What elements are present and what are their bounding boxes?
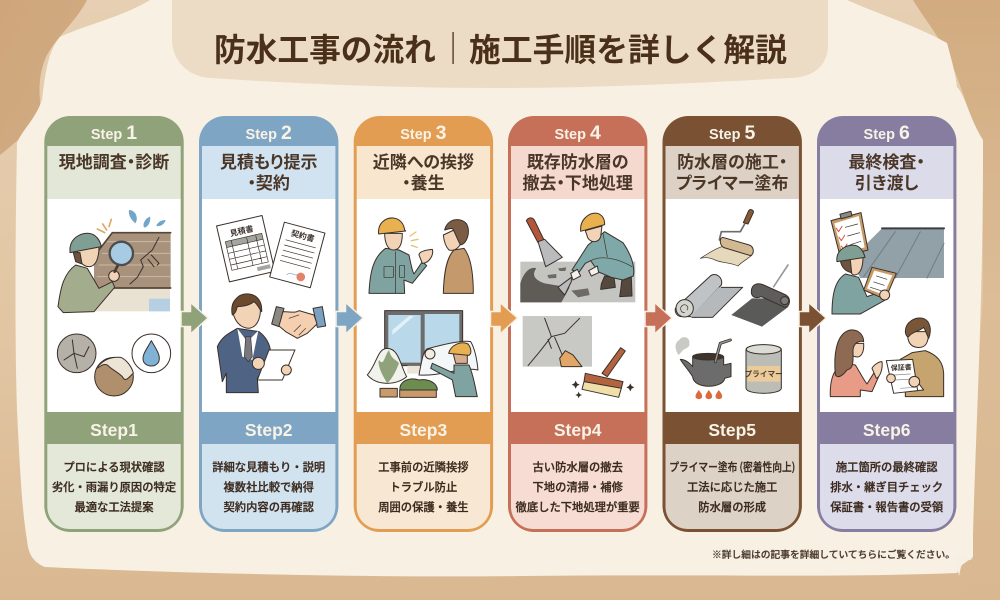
image area xyxy=(820,199,953,412)
heading band xyxy=(666,146,799,199)
description: 最適な工法提案 xyxy=(74,499,154,515)
illustration: primer and waterproofing materials xyxy=(675,210,789,399)
card frame xyxy=(662,116,802,532)
heading: 引き渡し xyxy=(855,169,919,194)
step label: Step 2 xyxy=(246,122,292,144)
description: 排水・継ぎ目チェック xyxy=(830,479,943,495)
heading: 撤去・下地処理 xyxy=(522,169,633,194)
illustration: removal and surface preparation xyxy=(520,213,635,398)
illustration: primer and waterproofing materials: プライマー xyxy=(745,369,783,380)
description: 工法に応じた施工 xyxy=(687,479,777,495)
card frame xyxy=(199,116,338,532)
arrow: step 2 to 3 xyxy=(336,302,363,334)
step band label: Step5 xyxy=(708,420,756,440)
step label: Step 3 xyxy=(400,122,447,144)
illustration: final inspection and handover xyxy=(830,211,944,397)
heading band xyxy=(820,146,953,199)
heading: 近隣への挨拶 xyxy=(373,148,474,173)
panel: step 2 xyxy=(199,116,338,532)
heading: 既存防水層の xyxy=(527,148,629,173)
description: 保証書・報告書の受領 xyxy=(830,499,944,515)
heading: 現地調査・診断 xyxy=(59,148,169,173)
step label: Step 1 xyxy=(91,122,137,144)
heading: 最終検査・ xyxy=(848,148,925,173)
card frame xyxy=(508,116,647,532)
heading: 見積もり提示 xyxy=(220,148,318,173)
panel: step 1 xyxy=(44,116,184,532)
arrow: step 4 to 5 xyxy=(645,302,672,334)
card frame xyxy=(817,116,956,532)
step band label: Step3 xyxy=(400,420,447,440)
panel: step 4 xyxy=(508,116,647,532)
step band label: Step1 xyxy=(90,420,138,440)
heading: ・契約 xyxy=(247,169,290,194)
description: 徹底した下地処理が重要 xyxy=(516,499,640,515)
description: プライマー塗布 (密着性向上) xyxy=(669,459,795,475)
title: 防水工事の流れ xyxy=(214,25,436,71)
heading band xyxy=(357,146,490,199)
sparkle xyxy=(945,546,973,576)
description band xyxy=(47,444,181,529)
step band label: Step6 xyxy=(863,420,911,440)
description: プロによる現状確認 xyxy=(63,459,165,475)
title plate xyxy=(172,0,828,88)
description: 劣化・雨漏り原因の特定 xyxy=(52,479,176,495)
panel: step 3 xyxy=(354,116,493,532)
step label: Step 4 xyxy=(555,122,601,144)
description: 防水層の形成 xyxy=(698,499,766,515)
image area xyxy=(357,199,490,412)
step band label: Step2 xyxy=(245,420,293,440)
description band xyxy=(666,444,799,529)
image area xyxy=(47,199,181,412)
illustration: final inspection and handover: 保証書 xyxy=(890,362,912,374)
heading: プライマー塗布 xyxy=(676,169,789,194)
image area xyxy=(511,199,644,412)
description band xyxy=(202,444,335,529)
arrow: step 3 to 4 xyxy=(490,302,518,334)
description: 詳細な見積もり・説明 xyxy=(212,459,325,475)
description: 工事前の近隣挨拶 xyxy=(378,459,469,475)
description band xyxy=(820,444,953,529)
illustration: inspection xyxy=(57,210,171,396)
heading: ・養生 xyxy=(402,169,445,194)
card frame xyxy=(354,116,493,532)
description: 周囲の保護・養生 xyxy=(378,499,469,515)
heading: 防水層の施工・ xyxy=(677,148,787,173)
arrow: step 5 to 6 xyxy=(799,302,826,334)
description: 施工箇所の最終確認 xyxy=(836,459,938,475)
illustration: estimate and contract xyxy=(217,215,326,393)
step label: Step 5 xyxy=(709,122,755,144)
description: 古い防水層の撤去 xyxy=(533,459,623,475)
heading band xyxy=(202,146,335,199)
description: トラブル防止 xyxy=(390,479,457,495)
description band xyxy=(357,444,490,529)
illustration: greeting and protection xyxy=(367,218,478,397)
description: 複数社比較で納得 xyxy=(224,479,314,495)
image area xyxy=(202,199,335,412)
card frame xyxy=(44,116,184,532)
heading band xyxy=(47,146,181,199)
illustration: estimate and contract: 見積書 xyxy=(229,223,255,239)
illustration: estimate and contract: 契約書 xyxy=(290,228,316,245)
step band label: Step4 xyxy=(554,420,602,440)
image area xyxy=(666,199,799,412)
panel: step 5 xyxy=(662,116,802,532)
heading band xyxy=(511,146,644,199)
step label: Step 6 xyxy=(864,122,910,144)
subtitle: 施工手順を詳しく解説 xyxy=(469,25,787,71)
arrow: step 1 to 2 xyxy=(181,302,208,334)
description band xyxy=(511,444,644,529)
description: 下地の清掃・補修 xyxy=(533,479,624,495)
footnote: ※詳し細はの記事を詳細していてちらにご覧ください。 xyxy=(712,547,955,561)
description: 契約内容の再確認 xyxy=(224,499,315,515)
panel: step 6 xyxy=(817,116,956,532)
